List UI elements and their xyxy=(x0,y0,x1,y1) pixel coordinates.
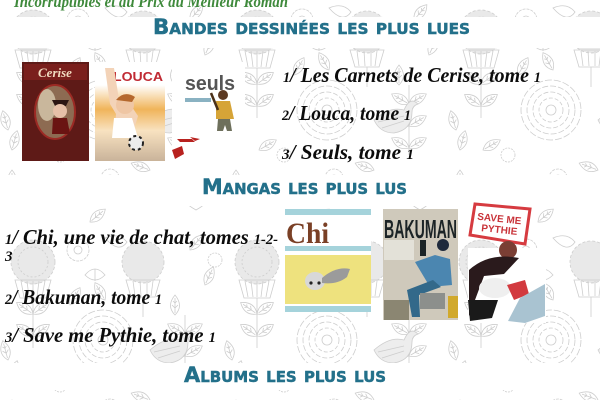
cover: Le Carnet de Cerise xyxy=(22,62,89,161)
cover: Save me Pythie xyxy=(468,204,546,323)
cover: Bakuman xyxy=(383,209,458,320)
cover: Chi: Chi xyxy=(286,217,329,250)
heading: bandes dessinées: Bandes dessinées les plus lues xyxy=(153,15,470,39)
list: bandes dessinées ranking: 2/ Louca, tome 1 xyxy=(281,101,411,125)
list: mangas ranking: 2/ Bakuman, tome 1 xyxy=(4,285,162,309)
cover: Seuls: seuls xyxy=(185,73,235,95)
list: mangas ranking: 3 xyxy=(4,249,13,265)
cover: Louca: LOUCA xyxy=(113,69,164,84)
list: mangas ranking: 1/ Chi, une vie de chat, tomes 1-2- xyxy=(5,225,278,249)
list: mangas ranking: 3/ Save me Pythie, tome 1 xyxy=(4,323,216,347)
list: mangas ranking xyxy=(4,225,278,347)
heading: mangas: Mangas les plus lus xyxy=(202,175,407,199)
cover: Chi xyxy=(285,209,371,312)
heading: albums: Albums les plus lus xyxy=(184,363,386,387)
cover: Bakuman: BAKUMAN xyxy=(384,214,457,244)
cover: Le Carnet de Cerise: Cerise xyxy=(38,65,72,80)
cover: Save me Pythie: SAVE ME xyxy=(477,212,522,227)
cover: Seuls xyxy=(172,62,245,165)
cover: Louca xyxy=(95,62,165,161)
list: bandes dessinées ranking: 3/ Seuls, tome 1 xyxy=(281,140,414,164)
list: bandes dessinées ranking: 1/ Les Carnets de Cerise, tome 1 xyxy=(283,63,541,87)
cover: Save me Pythie: PYTHIE xyxy=(481,223,518,238)
list: bandes dessinées ranking xyxy=(281,63,541,164)
